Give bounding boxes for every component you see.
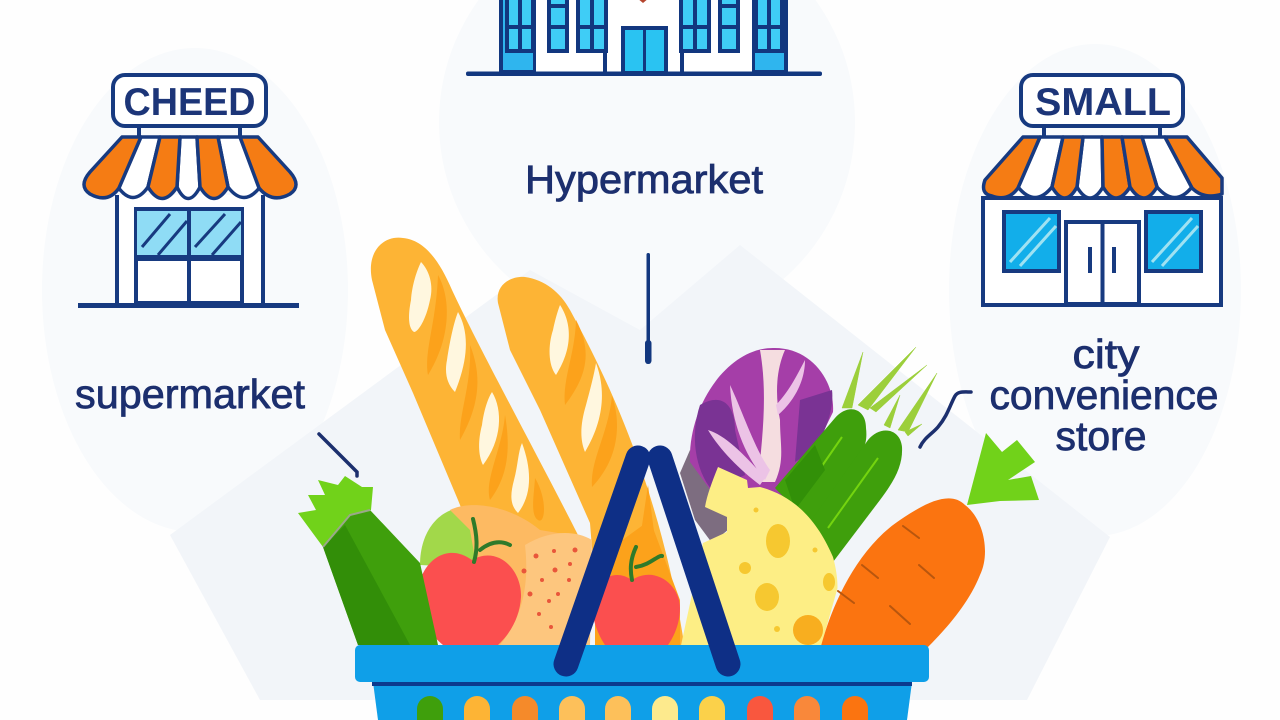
awning: striped orange and white	[984, 137, 1222, 198]
green onion tops	[842, 347, 937, 436]
label: city convenience store: store	[1056, 413, 1146, 459]
basket handles	[566, 458, 728, 664]
cheese wedge	[680, 467, 838, 650]
arrow: hypermarket to basket	[645, 253, 652, 364]
arrow: supermarket to basket	[319, 434, 357, 476]
zucchini	[323, 510, 438, 645]
label: supermarket: supermarket	[75, 371, 306, 417]
cabbage	[680, 348, 833, 543]
baguette: left	[371, 238, 578, 560]
icon: supermarket store	[78, 75, 299, 308]
sign: CHEED: CHEED	[124, 81, 256, 124]
illustration: basket of groceries	[298, 238, 1039, 720]
lettuce	[298, 476, 373, 547]
carrot	[820, 433, 1039, 650]
sign: SMALL	[1021, 75, 1183, 137]
cucumbers	[775, 409, 902, 562]
arrow: convenience store to basket	[920, 392, 971, 447]
baguette: right	[498, 277, 685, 650]
icon: hypermarket building	[466, 0, 822, 76]
label: city convenience store: convenience	[990, 372, 1218, 418]
produce: apple, bun and tomatoes	[418, 505, 680, 645]
label: city convenience store	[990, 331, 1218, 459]
awning: striped orange and white	[84, 137, 296, 198]
basket body	[355, 645, 929, 720]
sign: CHEED	[113, 75, 266, 137]
icon: convenience store	[983, 75, 1222, 305]
label: Hypermarket: Hypermarket	[525, 158, 763, 202]
sign: SMALL: SMALL	[1035, 81, 1171, 124]
label: city convenience store: city	[1072, 331, 1140, 377]
